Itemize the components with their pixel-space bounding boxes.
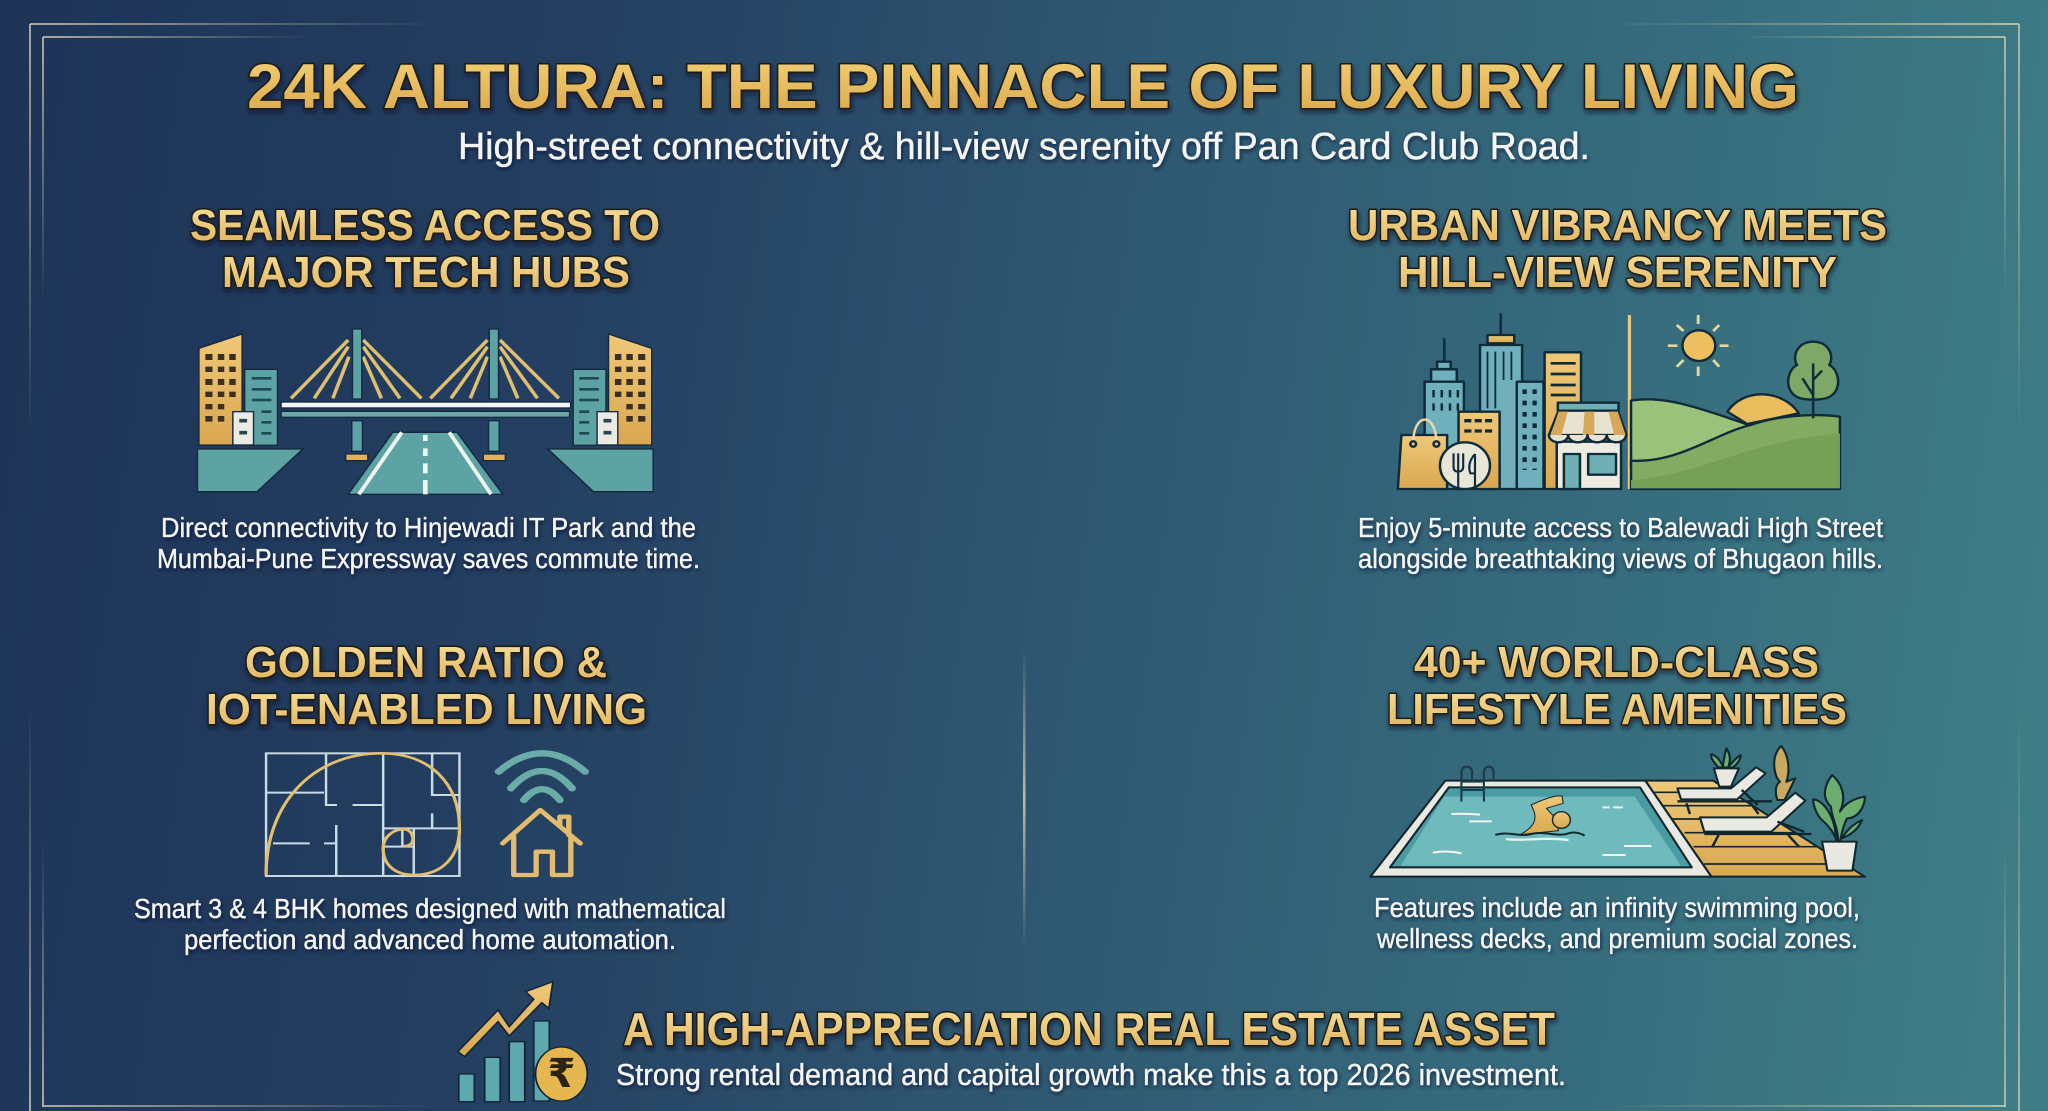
heading: urban vibrancy <box>1348 201 1887 297</box>
title: 24K ALTURA: THE PINNACLE OF LUXURY LIVING <box>247 52 1799 122</box>
heading: golden ratio <box>206 638 647 734</box>
heading: golden ratio: IOT-ENABLED LIVING <box>206 685 647 734</box>
heading: amenities <box>1387 638 1847 734</box>
panel: golden ratio and IoT <box>134 638 726 955</box>
description: tech hubs <box>157 512 700 574</box>
description: tech hubs: Mumbai-Pune Expressway saves commute time. <box>157 543 700 574</box>
description: amenities <box>1374 892 1860 954</box>
panel: amenities <box>1370 638 1865 954</box>
icon: bridge and road with towers <box>197 329 653 494</box>
heading: urban vibrancy: HILL-VIEW SERENITY <box>1398 248 1837 297</box>
description: urban vibrancy: alongside breathtaking views of Bhugaon hills. <box>1358 543 1883 574</box>
heading: tech hubs <box>190 201 660 297</box>
panel: tech hubs <box>157 201 700 574</box>
icon: growth chart with rupee coin: ₹ <box>548 1051 575 1097</box>
heading: investment: A HIGH-APPRECIATION REAL ESTATE ASSET <box>623 1003 1555 1055</box>
description: golden ratio: Smart 3 & 4 BHK homes designed with mathematical <box>134 893 726 924</box>
icon: pool with deck and loungers <box>1370 746 1865 877</box>
description: amenities: Features include an infinity swimming pool, <box>1374 892 1860 923</box>
description: golden ratio: perfection and advanced home automation. <box>184 924 676 955</box>
description: amenities: wellness decks, and premium social zones. <box>1376 923 1858 954</box>
icon: city and hills <box>1398 313 1840 489</box>
heading: amenities: LIFESTYLE AMENITIES <box>1387 685 1847 734</box>
description: urban vibrancy <box>1358 512 1883 574</box>
description: tech hubs: Direct connectivity to Hinjewadi IT Park and the <box>161 512 696 543</box>
description: investment: Strong rental demand and capital growth make this a top 2026 investment. <box>616 1057 1566 1092</box>
icon: growth chart with rupee coin <box>458 982 587 1102</box>
panel: investment <box>458 982 1566 1102</box>
description: golden ratio <box>134 893 726 955</box>
panel: urban vibrancy <box>1348 201 1887 574</box>
heading: tech hubs: MAJOR TECH HUBS <box>222 248 630 297</box>
heading: tech hubs: SEAMLESS ACCESS TO <box>190 201 660 250</box>
icon: golden ratio floor plan <box>266 753 459 876</box>
subtitle: High-street connectivity & hill-view serenity off Pan Card Club Road. <box>458 126 1590 168</box>
description: urban vibrancy: Enjoy 5-minute access to Balewadi High Street <box>1358 512 1883 543</box>
heading: urban vibrancy: URBAN VIBRANCY MEETS <box>1348 201 1887 250</box>
heading: amenities: 40+ WORLD-CLASS <box>1414 638 1819 687</box>
icon: wifi smart home <box>499 753 585 875</box>
heading: golden ratio: GOLDEN RATIO & <box>245 638 607 687</box>
